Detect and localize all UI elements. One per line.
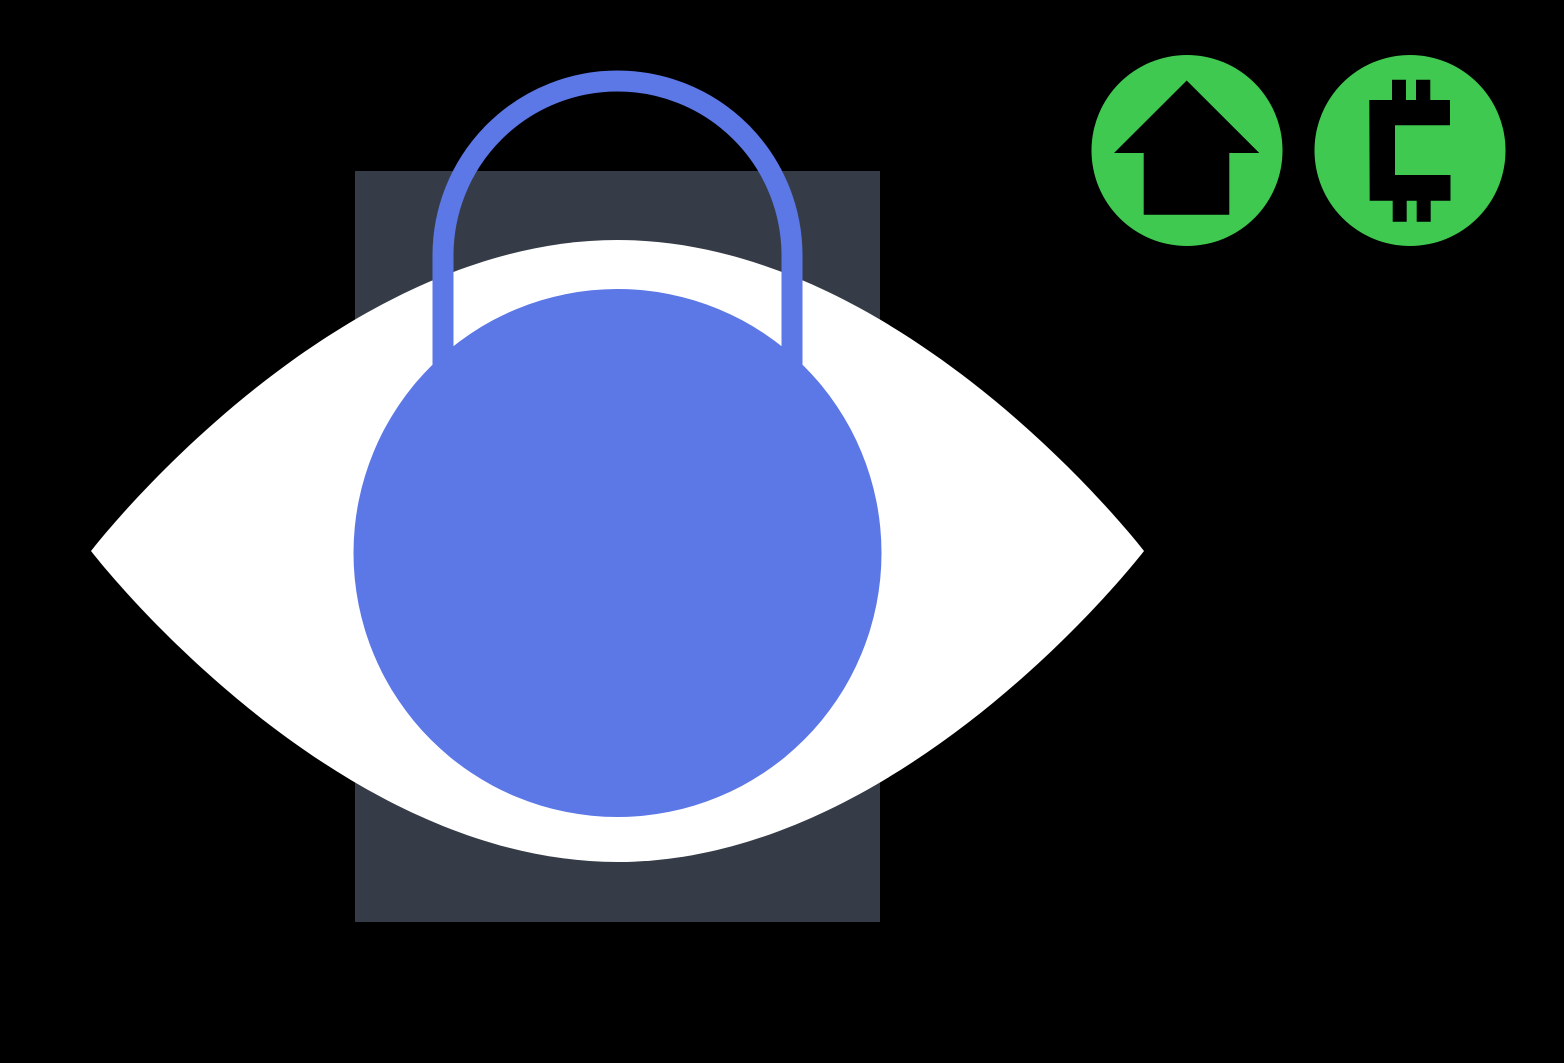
icon: white eye shape: [91, 240, 1144, 862]
icon: green house badge: [1092, 55, 1282, 246]
panel: dark padlock body: [355, 171, 880, 922]
icon: green bitcoin badge: [1314, 55, 1506, 246]
icon: blue iris circle: [354, 289, 882, 817]
icon: padlock shackle: [443, 81, 792, 380]
